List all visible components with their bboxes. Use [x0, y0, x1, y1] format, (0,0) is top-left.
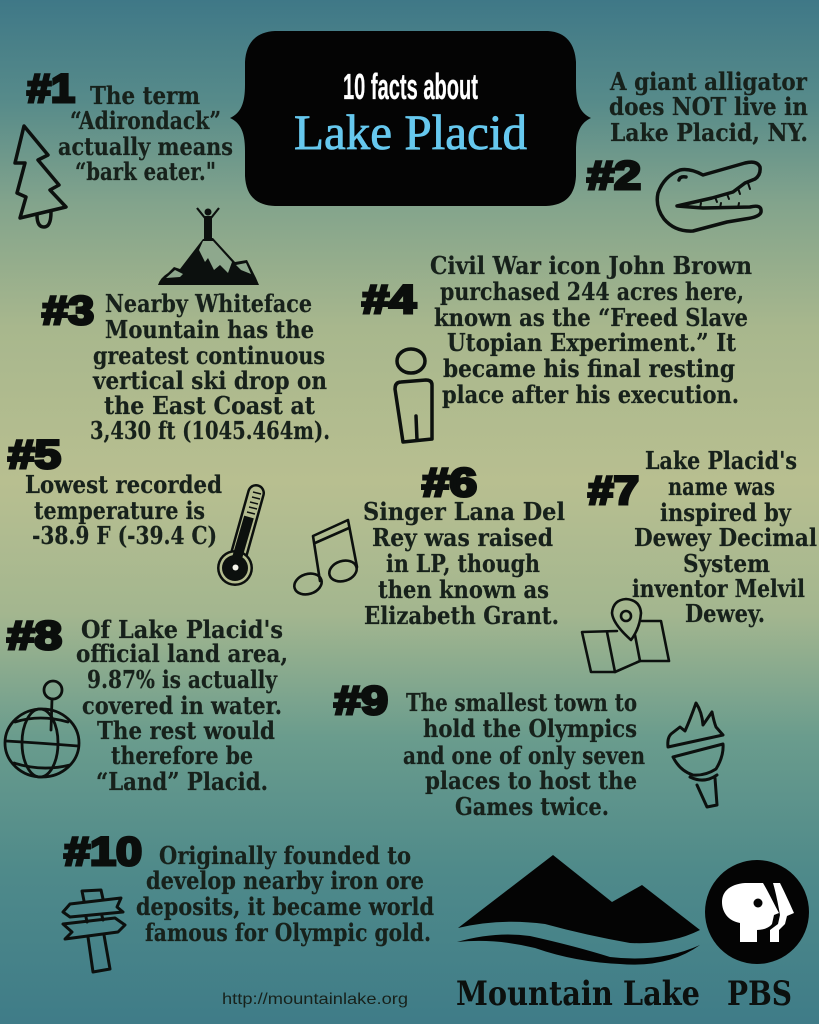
number 1: #1 — [27, 67, 75, 111]
logo wordmark: Mountain Lake — [456, 974, 700, 1014]
icon: map with pin — [582, 599, 669, 672]
text: fact 7: inspired by — [660, 498, 792, 527]
icon: pine tree — [15, 126, 66, 227]
panel: fact 9 — [334, 679, 723, 821]
text: fact 10: Originally founded to — [159, 841, 411, 870]
icon: person — [395, 349, 432, 442]
text: fact 10: develop nearby iron ore — [146, 866, 424, 895]
text: fact 6: in LP, though — [386, 549, 540, 578]
number 9: #9 — [334, 679, 388, 723]
text: fact 1 — [58, 81, 233, 186]
text: fact 3: the East Coast at — [104, 391, 315, 420]
icon: Olympic torch — [668, 703, 723, 807]
text: fact 3: vertical ski drop on — [92, 366, 327, 395]
text: fact 1: “Adirondack” — [70, 106, 221, 135]
number 7: #7 — [588, 469, 639, 513]
panel: fact 6 — [292, 461, 565, 630]
text: fact 6: then known as — [378, 575, 549, 604]
text: fact 7: Lake Placid's — [645, 446, 797, 475]
text: fact 4: place after his execution. — [442, 380, 739, 409]
panel: fact 3 — [42, 289, 330, 445]
text: fact 4: became his final resting — [443, 354, 735, 383]
text: fact 10: famous for Olympic gold. — [145, 918, 431, 947]
text: fact 10 — [136, 841, 434, 947]
text: fact 8 — [76, 615, 288, 796]
text: fact 4: known as the “Freed Slave — [434, 303, 748, 332]
icon: alligator — [657, 162, 761, 231]
text: fact 7: name was — [668, 472, 775, 501]
title line 1: 10 facts about — [343, 66, 478, 107]
text: fact 5: temperature is — [34, 496, 205, 525]
number 8: #8 — [7, 614, 62, 658]
number 4: #4 — [362, 278, 417, 322]
text: fact 1: The term — [90, 81, 200, 110]
text: fact 6: Singer Lana Del — [363, 497, 565, 526]
panel: fact 4 — [362, 251, 752, 442]
text: fact 6: Elizabeth Grant. — [364, 601, 559, 630]
panel: fact 10 — [63, 830, 434, 972]
text: fact 8: The rest would — [97, 716, 275, 745]
text: fact 9: hold the Olympics — [423, 714, 637, 743]
text: fact 9 — [403, 688, 645, 821]
text: fact 4: purchased 244 acres here, — [440, 277, 744, 306]
text: fact 8: covered in water. — [82, 691, 282, 720]
text: fact 1: actually means — [58, 132, 233, 161]
panel: fact 2 — [587, 67, 808, 231]
icon: person on mountain — [158, 208, 259, 285]
text: fact 3 — [90, 289, 330, 445]
text: fact 8: official land area, — [76, 639, 288, 668]
text: fact 3: greatest continuous — [93, 341, 325, 370]
number 6: #6 — [422, 461, 477, 505]
icon: music notes — [292, 520, 359, 598]
text: fact 5: Lowest recorded — [25, 470, 222, 499]
title panel — [230, 31, 591, 206]
title line 2: Lake Placid — [294, 104, 527, 160]
text: fact 4: Civil War icon John Brown — [430, 251, 752, 280]
text: fact 7: Dewey. — [685, 599, 765, 628]
text: fact 1: “bark eater." — [75, 157, 216, 186]
text: fact 3: 3,430 ft (1045.464m). — [90, 416, 330, 445]
number 3: #3 — [42, 289, 94, 333]
text: fact 5 — [25, 470, 222, 550]
black brace-shaped title box — [230, 31, 591, 206]
logo PBS wordmark: PBS — [727, 974, 792, 1014]
text: fact 7 — [632, 446, 817, 628]
text: fact 8: “Land” Placid. — [96, 767, 268, 796]
number 2: #2 — [587, 154, 641, 198]
text: fact 8: Of Lake Placid's — [81, 615, 283, 644]
text: fact 6 — [363, 497, 565, 630]
text: fact 8: therefore be — [111, 741, 253, 770]
logo mountains and waves — [457, 855, 700, 965]
text: fact 4: Utopian Experiment.” It — [447, 328, 736, 357]
text: fact 6: Rey was raised — [372, 523, 553, 552]
text: fact 3: Nearby Whiteface — [105, 289, 312, 318]
panel: fact 8 — [5, 614, 288, 796]
text: fact 4 — [430, 251, 752, 409]
text: fact 5: -38.9 F (-39.4 C) — [32, 521, 217, 550]
text: fact 3: Mountain has the — [105, 315, 314, 344]
icon: globe with pin — [5, 681, 79, 777]
text: fact 9: Games twice. — [455, 792, 609, 821]
panel: fact 1 — [15, 67, 233, 227]
panel: fact 7 — [582, 446, 817, 672]
icon: thermometer — [217, 492, 261, 586]
PBS circle logo — [705, 860, 809, 964]
number 5: #5 — [8, 433, 61, 477]
number 10: #10 — [64, 830, 142, 874]
website link: http://mountainlake.org — [222, 991, 408, 1008]
text: fact 2 — [609, 67, 808, 147]
text: fact 10: deposits, it became world — [136, 892, 434, 921]
text: fact 9: places to host the — [425, 766, 637, 795]
text: fact 9: The smallest town to — [406, 688, 637, 717]
text: fact 7: System — [683, 549, 770, 578]
icon: signpost — [63, 890, 125, 972]
text: fact 8: 9.87% is actually — [87, 665, 278, 694]
Mountain Lake PBS logo — [456, 855, 809, 1014]
text: fact 9: and one of only seven — [403, 741, 645, 770]
panel: fact 5 — [8, 433, 261, 586]
